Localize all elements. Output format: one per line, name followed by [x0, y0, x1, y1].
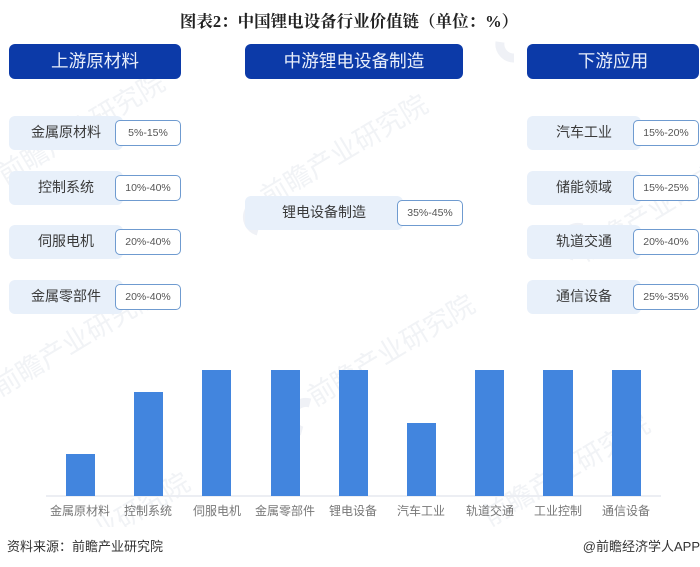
bar chart: 金属原材料 — [50, 504, 110, 518]
bar chart: 轨道交通 — [466, 504, 514, 518]
title: 图表2：中国锂电设备行业价值链（单位：%） — [180, 12, 518, 31]
item: 金属零部件: 20%-40% — [125, 291, 171, 303]
item: 储能领域: 15%-25% — [643, 182, 689, 194]
watermarks: 前瞻产业研究院 — [303, 289, 480, 412]
item: 金属原材料: 金属原材料 — [31, 124, 101, 140]
bar chart: 金属零部件 — [255, 504, 315, 518]
source: 资料来源：前瞻产业研究院 — [7, 539, 163, 554]
item: 金属原材料 — [9, 116, 181, 150]
item: 控制系统 — [9, 171, 181, 205]
item: 通信设备 — [527, 280, 699, 314]
item: 伺服电机 — [9, 225, 181, 259]
item: 轨道交通 — [527, 225, 699, 259]
item: 金属原材料: 5%-15% — [128, 127, 168, 139]
header: midstream: 中游锂电设备制造 — [284, 51, 424, 71]
header: midstream — [245, 44, 463, 79]
bar chart: 控制系统 — [124, 504, 172, 518]
item: 伺服电机: 20%-40% — [125, 236, 171, 248]
bar chart: 汽车工业 — [397, 504, 445, 518]
header: downstream: 下游应用 — [578, 51, 648, 71]
item: 汽车工业 — [527, 116, 699, 150]
bar chart: 锂电设备 — [329, 504, 377, 518]
credit: @前瞻经济学人APP — [583, 539, 700, 554]
item: 锂电设备制造 — [245, 196, 463, 230]
item: 汽车工业: 汽车工业 — [556, 124, 612, 140]
item: 控制系统: 10%-40% — [125, 182, 171, 194]
item: 通信设备: 通信设备 — [556, 288, 612, 304]
item: 金属零部件: 金属零部件 — [31, 288, 101, 304]
header: upstream: 上游原材料 — [51, 51, 139, 71]
header: downstream — [527, 44, 699, 79]
item: 控制系统: 控制系统 — [38, 179, 94, 195]
item: 锂电设备制造: 锂电设备制造 — [282, 204, 366, 220]
bar chart: 通信设备 — [602, 504, 650, 518]
item: 伺服电机: 伺服电机 — [38, 233, 94, 249]
watermarks: 前瞻产业研究院 — [256, 89, 433, 212]
bar chart: 伺服电机 — [193, 504, 241, 518]
header: upstream — [9, 44, 181, 79]
item: 轨道交通: 轨道交通 — [556, 233, 612, 249]
item: 轨道交通: 20%-40% — [643, 236, 689, 248]
item: 储能领域 — [527, 171, 699, 205]
item: 汽车工业: 15%-20% — [643, 127, 689, 139]
item: 储能领域: 储能领域 — [556, 179, 612, 195]
item: 通信设备: 25%-35% — [643, 291, 689, 303]
item: 金属零部件 — [9, 280, 181, 314]
bar chart: 工业控制 — [534, 504, 582, 518]
item: 锂电设备制造: 35%-45% — [407, 207, 453, 219]
